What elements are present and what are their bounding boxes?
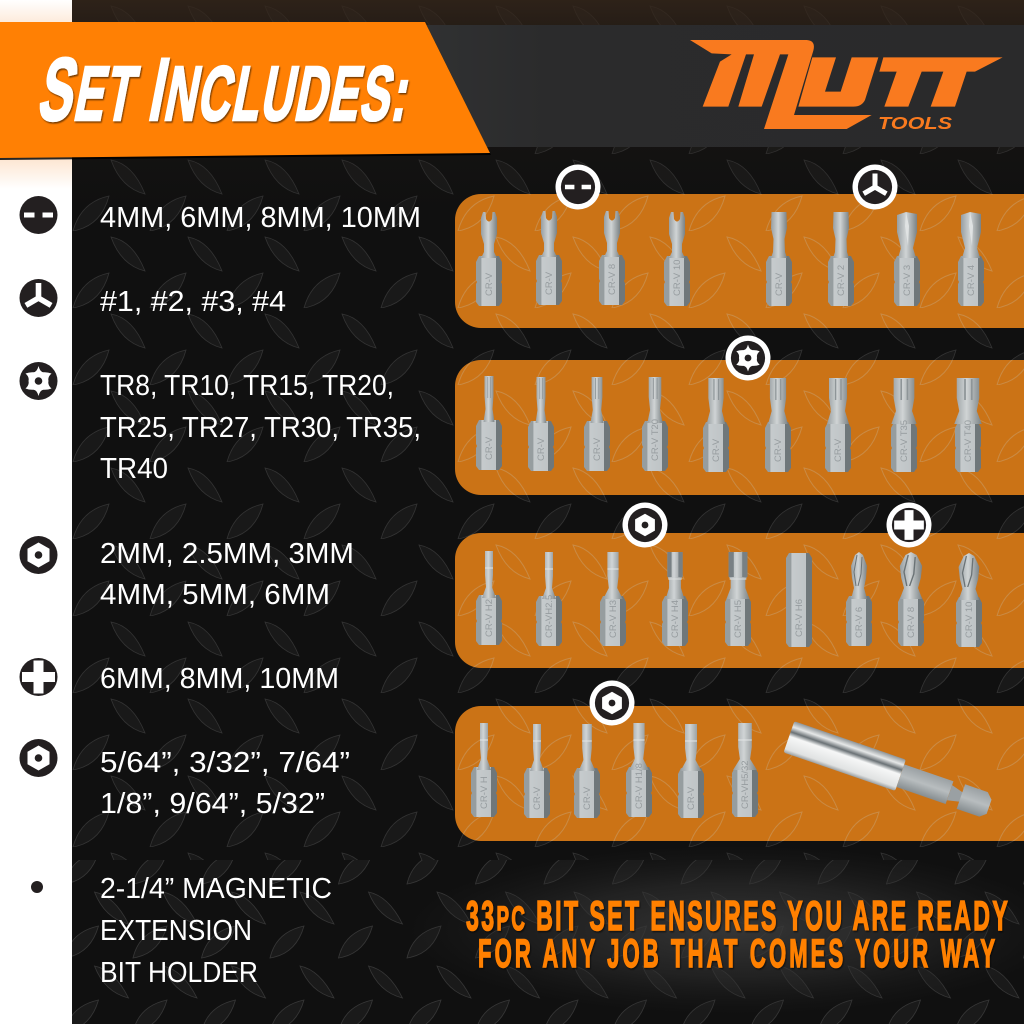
badge: slotted [556,164,600,210]
bit: tri-wing 2 [828,212,854,306]
bit: spanner 4 [476,212,502,306]
bit: phillips 10mm [956,553,982,647]
bit: hex 6mm: CR-V H6 [794,599,805,637]
icon: torx [20,362,58,400]
bit: TR35: CR-V T35 [899,420,910,462]
bit: hex 6mm [786,553,812,647]
bit: hex 5/32 [732,723,758,817]
tagline: 33PC BIT SET ENSURES YOU ARE READY [466,893,1008,940]
bit: spanner 6 [536,211,562,305]
bit: TR10 [528,377,554,471]
spec: metric hex sizes: 2MM, 2.5MM, 3MM [100,538,354,570]
bit: phillips 6mm [846,552,872,646]
bit: hex 5mm [725,552,751,646]
spec: phillips sizes: 6MM, 8MM, 10MM [100,663,339,695]
panel: torx bits [455,360,1024,495]
bit: spanner 6: CR-V [544,271,555,295]
bit: TR25 [703,378,729,472]
bit: hex 5/64: CR-V H [479,776,490,809]
bit: TR10: CR-V [536,437,547,461]
bit: hex 3mm: CR-V H3 [608,600,619,638]
bit: hex 4mm [662,552,688,646]
tagline: FOR ANY JOB THAT COMES YOUR WAY [478,931,995,976]
panel: spanner and tri-wing bits [455,194,1024,328]
bit: hex 4mm: CR-V H4 [670,600,681,638]
bit: TR20 [642,377,668,471]
bit: TR30 [825,378,851,472]
bit: hex 1/8 [626,723,652,817]
logo letter U [798,57,878,107]
title: Set Includes: SET INCLUDES: [32,39,420,139]
panel: metric hex and phillips bits [455,533,1024,668]
spec: spanner sizes: 4MM, 6MM, 8MM, 10MM [100,202,421,234]
logo word tools: TOOLS [878,113,953,133]
bit: hex 9/64 [678,724,704,818]
bit: TR15: CR-V [592,437,603,461]
badge: tri-wing [852,164,898,210]
bit: phillips 8mm: CR-V 8 [906,607,917,638]
icon: phillips [20,658,58,696]
spec: metric hex sizes: 4MM, 5MM, 6MM [100,579,330,611]
spec: magnetic holder: EXTENSION [100,915,252,947]
header band: dark logo bar [425,25,1024,147]
bit: TR27: CR-V [773,438,784,462]
bit: TR30: CR-V [833,438,844,462]
bit: hex 7/64 [574,724,600,818]
bit: phillips 8mm [898,552,924,646]
bit: hex 2mm [476,551,502,645]
bit: tri-wing 3: CR-V 3 [902,265,913,296]
spec: torx sizes: TR8, TR10, TR15, TR20, [100,370,394,402]
bit: hex 3mm [600,552,626,646]
bit: spanner 8 [599,211,625,305]
bit: TR20: CR-V T20 [650,419,661,461]
spec: imperial hex sizes [100,747,350,820]
left white strip [0,0,72,1024]
bit: phillips 6mm: CR-V 6 [854,607,865,638]
icon: bullet [31,881,43,893]
bit: phillips 10mm: CR-V 10 [964,602,975,638]
bit: spanner 4: CR-V [484,272,495,296]
bit: tri-wing 3 [894,212,920,306]
bit: hex 5/32: CR-VH5/32 [740,760,751,809]
badge: torx [726,336,770,380]
badge: imperial hex [590,680,634,726]
bit: TR8 [476,376,502,470]
spec: magnetic holder: 2-1/4” MAGNETIC [100,873,332,905]
magnetic bit holder [784,721,995,821]
bit: spanner 10: CR-V 10 [672,260,683,296]
bit: tri-wing 1: CR-V [774,272,785,296]
icon: imperial hex [20,739,58,777]
bit: hex 2.5mm [536,552,562,646]
bit: hex 7/64: CR-V [582,786,593,810]
bit: hex 9/64: CR-V [686,786,697,810]
bit: TR40: CR-V T40 [963,420,974,462]
icon: metric hex [20,536,58,574]
bit: hex 2mm: CR-V H2 [484,599,495,637]
bit: spanner 10 [664,212,690,306]
bit: hex 2.5mm: CR-VH2.5 [544,595,555,638]
logo letter M [690,40,872,129]
bit: hex 5mm: CR-V H5 [733,600,744,638]
bit: hex 3/32: CR-V [532,786,543,810]
bit: TR35 [891,378,917,472]
spec: imperial hex sizes: 1/8”, 9/64”, 5/32” [100,788,325,820]
bit: TR27 [765,378,791,472]
icon: slotted spanner [20,196,58,234]
bit: TR8: CR-V [484,436,495,460]
bit: tri-wing 4: CR-V 4 [966,265,977,296]
orange title banner [0,22,491,160]
spec: magnetic holder: BIT HOLDER [100,957,258,989]
bit: TR15 [584,377,610,471]
logo: Mutt Tools [690,40,1003,133]
spec: imperial hex sizes: 5/64”, 3/32”, 7/64” [100,747,350,779]
spec: torx sizes: TR25, TR27, TR30, TR35, [100,412,421,444]
tagline [466,893,1008,976]
spec: torx sizes: TR40 [100,453,168,485]
bit: tri-wing 4 [958,212,984,306]
logo letters TT [879,57,1003,107]
panel: imperial hex bits and holder [455,706,1024,841]
bit: TR40 [954,378,982,472]
spec: metric hex sizes [100,538,354,611]
bit: spanner 8: CR-V 8 [607,264,618,295]
bit: TR25: CR-V [711,438,722,462]
spec: magnetic holder [100,873,332,989]
spec: tri-wing sizes: #1, #2, #3, #4 [100,286,286,318]
bit: hex 1/8: CR-V H1/8 [634,763,645,809]
bit: tri-wing 2: CR-V 2 [836,265,847,296]
bit: hex 5/64 [471,723,497,817]
bit: hex 3/32 [524,724,550,818]
badge: metric hex [622,502,668,548]
badge: phillips [886,502,932,548]
bit: tri-wing 1 [766,212,792,306]
spec: torx sizes [100,370,421,485]
icon: tri-wing [20,279,58,317]
